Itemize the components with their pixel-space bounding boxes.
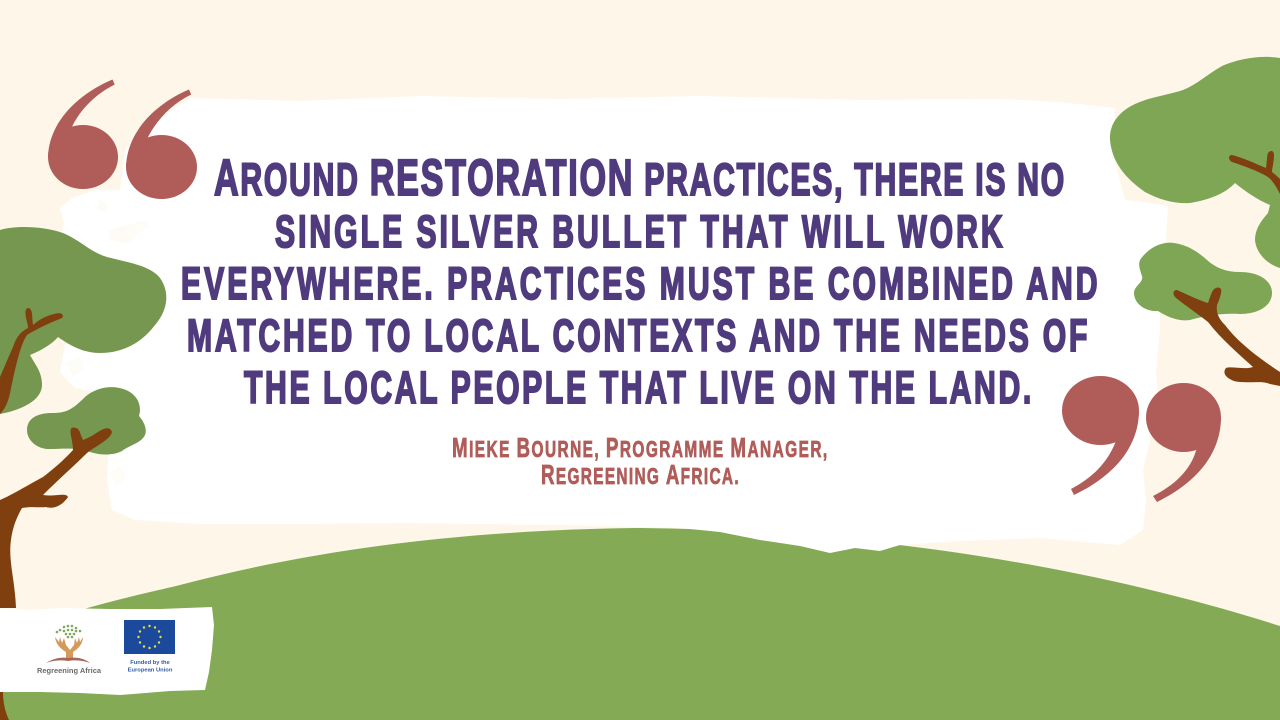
right tree upper crown — [1110, 57, 1280, 268]
EU funding text: European Union — [128, 668, 173, 674]
green hill — [0, 528, 1280, 720]
quote line 5: THE LOCAL PEOPLE THAT LIVE ON THE LAND. — [244, 363, 1031, 414]
right tree lower branch — [1173, 288, 1280, 386]
left tree lower crown — [27, 387, 146, 454]
quote text — [181, 150, 1098, 414]
attribution — [452, 432, 827, 491]
logo leaves — [56, 625, 81, 638]
logo hands and trunk — [55, 637, 83, 659]
torn white logo panel — [0, 607, 214, 695]
right tree upper branch — [1229, 151, 1280, 194]
logo wordmark: Regreening Africa — [37, 666, 102, 675]
EU funding text: Funded by the — [130, 660, 171, 666]
left tree upper branch — [0, 308, 63, 414]
attribution line 1: MIEKE BOURNE, PROGRAMME MANAGER, — [452, 432, 827, 464]
cream blotches on paper edge — [66, 200, 148, 486]
attribution line 2: REGREENING AFRICA. — [541, 459, 739, 491]
EU flag — [124, 620, 175, 654]
right tree — [1110, 57, 1280, 386]
quote line 2: SINGLE SILVER BULLET THAT WILL WORK — [275, 207, 1003, 258]
logo roots — [46, 658, 90, 663]
EU stars — [137, 625, 162, 649]
trunk base below logo — [0, 692, 9, 720]
closing quotation mark — [1062, 376, 1221, 502]
opening quotation mark — [48, 80, 197, 199]
quote line 1: AROUND RESTORATION PRACTICES, THERE IS NO — [214, 150, 1064, 207]
left tree — [0, 227, 166, 608]
logo strip — [0, 607, 214, 720]
right tree lower crown — [1134, 243, 1272, 320]
EU funding text — [128, 660, 173, 674]
left tree trunk and branches — [0, 427, 112, 608]
quote line 3: EVERYWHERE. PRACTICES MUST BE COMBINED AND — [181, 259, 1098, 310]
Regreening Africa logo — [37, 625, 102, 675]
quote line 4: MATCHED TO LOCAL CONTEXTS AND THE NEEDS OF — [187, 311, 1087, 362]
torn white paper panel — [60, 96, 1168, 553]
left tree upper crown — [0, 227, 166, 414]
